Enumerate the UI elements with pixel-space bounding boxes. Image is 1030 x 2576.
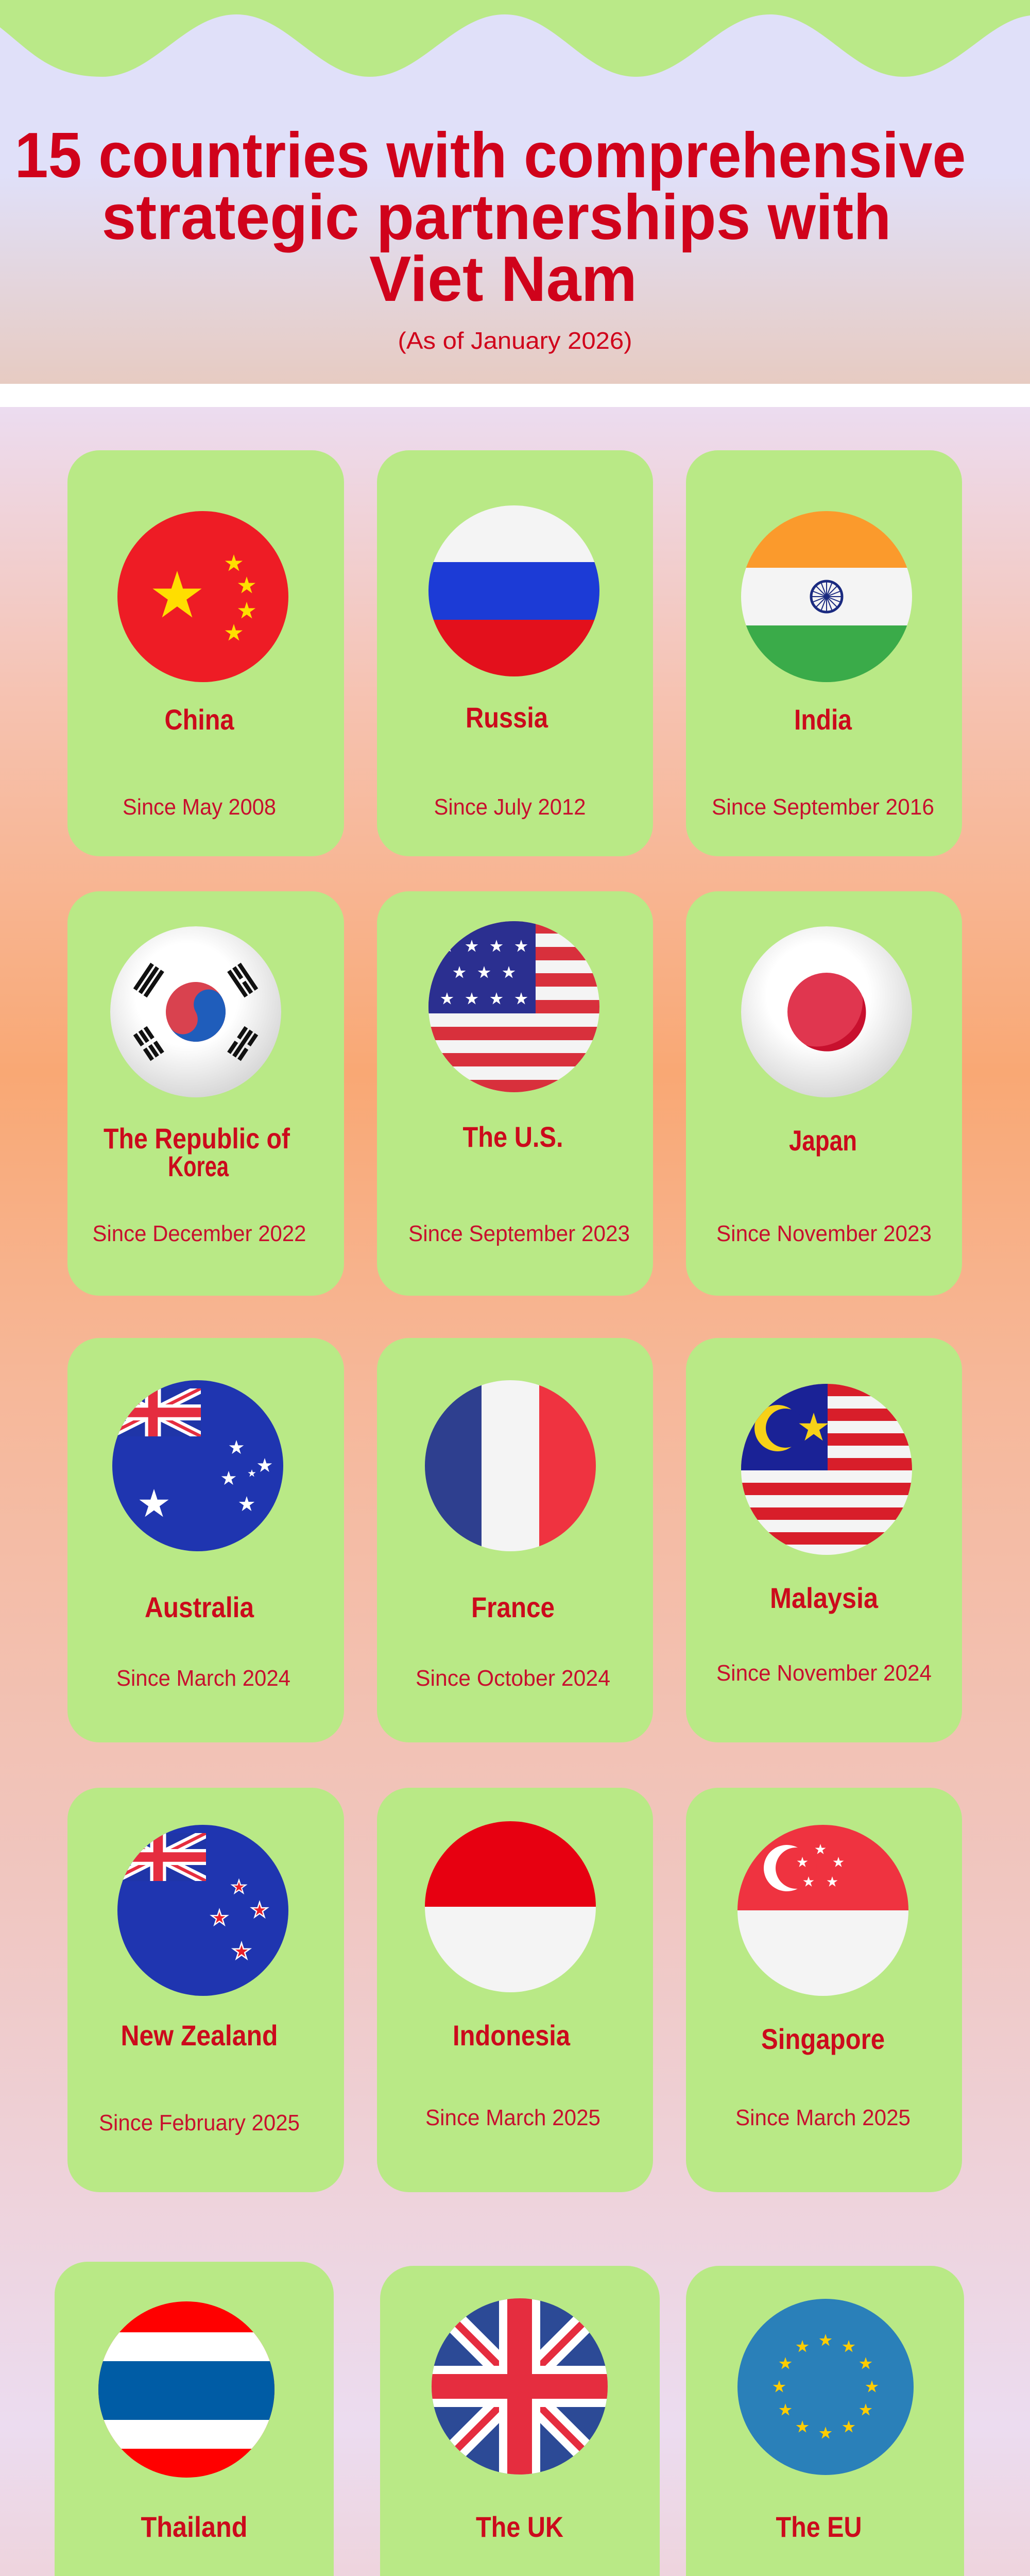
card: UK: The UK [476, 2511, 563, 2543]
card: Indonesia: Since March 2025 [425, 2105, 600, 2130]
card: EU [686, 2266, 964, 2576]
card: New Zealand: Since February 2025 [99, 2110, 300, 2136]
flag: UK [430, 2296, 610, 2477]
card: Russia: Russia [466, 701, 548, 734]
flag: EU [735, 2297, 916, 2477]
flag: Indonesia [423, 1819, 598, 1995]
card: France [377, 1338, 653, 1742]
card: US: The U.S. [462, 1121, 563, 1153]
title: Viet Nam [369, 244, 637, 315]
card: India: India [794, 703, 852, 736]
title: strategic partnerships with [102, 182, 891, 253]
card: Malaysia [686, 1338, 962, 1742]
card: Singapore: Singapore [761, 2023, 885, 2055]
flag: US [426, 919, 602, 1095]
card: Japan: Since November 2023 [716, 1221, 932, 1246]
card: China: Since May 2008 [123, 794, 276, 820]
flag: Japan [741, 926, 912, 1097]
card: China: China [165, 703, 234, 736]
card: Malaysia: Since November 2024 [716, 1660, 932, 1686]
card: France: France [471, 1591, 555, 1623]
card: India [686, 450, 962, 856]
card: China [67, 450, 344, 856]
card: UK [380, 2266, 660, 2576]
title [14, 120, 966, 315]
card: Korea: Korea [168, 1150, 229, 1182]
card: Indonesia: Indonesia [453, 2019, 571, 2052]
card: Singapore: Since March 2025 [735, 2105, 911, 2130]
card: EU: The EU [776, 2511, 862, 2543]
flag: India [739, 509, 914, 685]
header background [0, 0, 1030, 384]
card: Japan: Japan [789, 1124, 857, 1157]
flag: Korea [110, 926, 281, 1097]
card: US: Since September 2023 [408, 1221, 630, 1246]
subtitle: (As of January 2026) [398, 327, 632, 354]
card: New Zealand [67, 1788, 344, 2192]
flag: Malaysia [739, 1382, 914, 1557]
flag: China [115, 509, 290, 684]
card: Australia: Since March 2024 [116, 1666, 290, 1691]
flag: France [423, 1378, 598, 1553]
card: Australia: Australia [145, 1591, 254, 1623]
card: Japan [686, 891, 962, 1296]
card: New Zealand: New Zealand [121, 2019, 278, 2052]
flag: New Zealand [110, 1823, 290, 1998]
card: Russia: Since July 2012 [434, 794, 586, 820]
card: Indonesia [377, 1788, 653, 2192]
card: Thailand: Thailand [141, 2511, 247, 2543]
card: Korea: Since December 2022 [93, 1221, 306, 1246]
top wave [0, 0, 1030, 77]
flag: Australia [105, 1378, 285, 1553]
card: Australia [67, 1338, 344, 1742]
title: 15 countries with comprehensive [14, 120, 966, 191]
card: Korea: The Republic of [104, 1122, 290, 1155]
card: Singapore [686, 1788, 962, 2192]
card: Malaysia: Malaysia [770, 1582, 879, 1614]
card: France: Since October 2024 [416, 1666, 610, 1691]
flag: Singapore [735, 1823, 911, 1999]
card: Russia [377, 450, 653, 856]
card: Thailand [55, 2262, 334, 2576]
card: US [377, 891, 653, 1296]
card: Korea [67, 891, 344, 1296]
flag: Thailand [96, 2299, 277, 2480]
card: India: Since September 2016 [712, 794, 934, 820]
flag: Russia [426, 503, 602, 679]
